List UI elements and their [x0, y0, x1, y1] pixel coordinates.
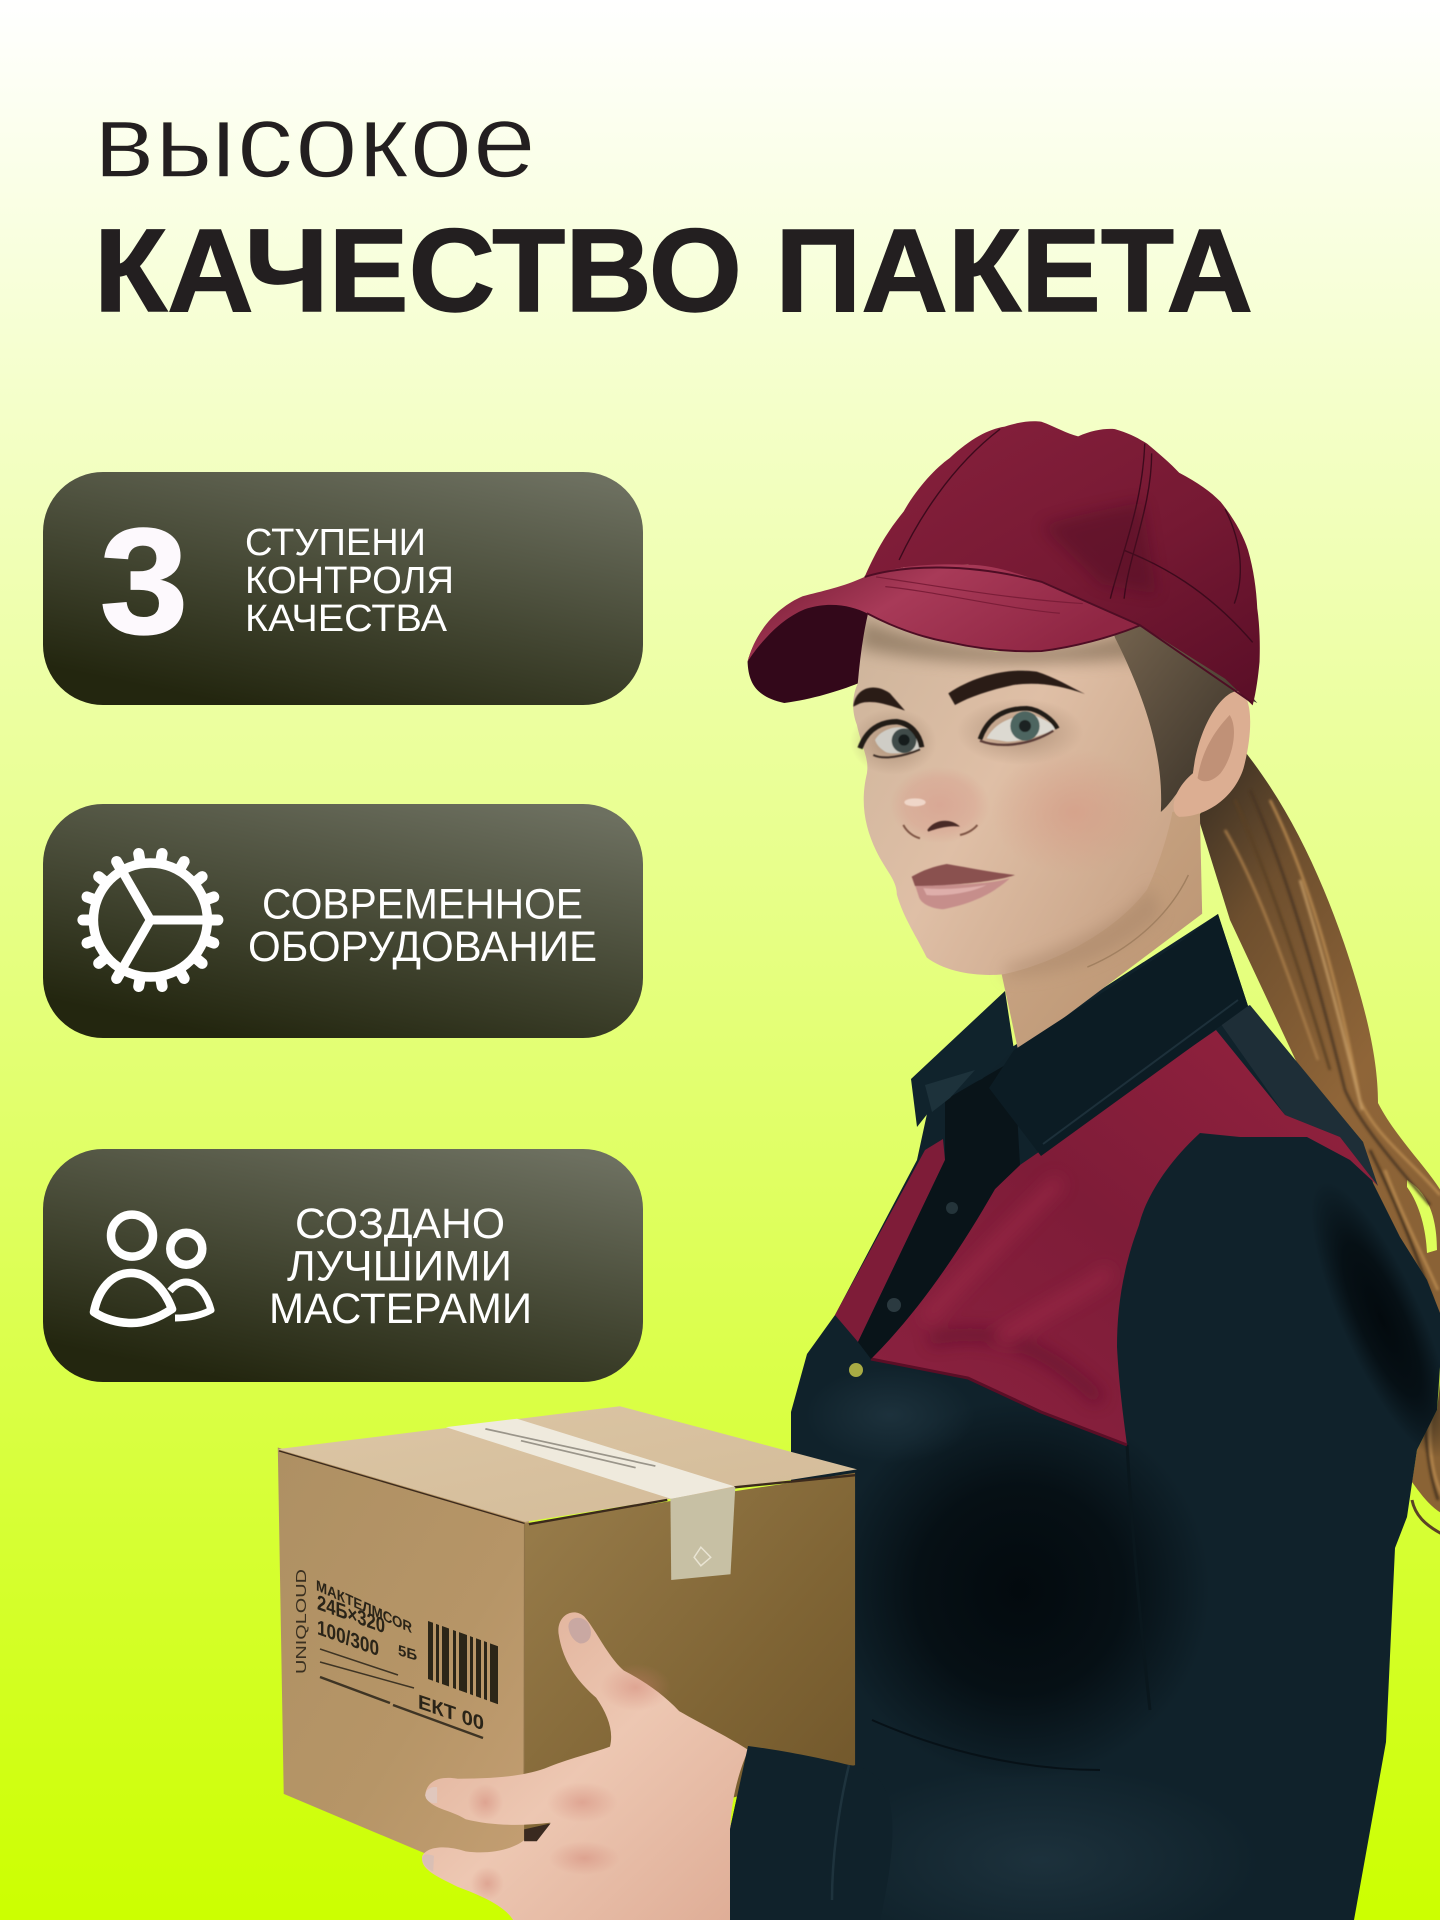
- knuckle reds: [468, 1664, 671, 1900]
- panel text: СОВРЕМЕННОЕ: [262, 880, 583, 928]
- cap shadow fold: [1041, 502, 1156, 594]
- cheek blush: [991, 749, 1156, 875]
- panel text: [248, 880, 597, 971]
- courier woman illustration: [278, 421, 1440, 1920]
- panel: modern equipment: [43, 804, 643, 1038]
- title line: высокое: высокое: [94, 83, 536, 200]
- cap crown: [865, 421, 1260, 705]
- ponytail hair: [1198, 749, 1440, 1534]
- panel text: ЛУЧШИМИ: [287, 1242, 512, 1290]
- eye socket shadows: [850, 698, 1083, 775]
- brim top: [748, 564, 1140, 662]
- panel: three stages of quality control: [43, 472, 643, 705]
- big number 3: 3: [100, 497, 188, 665]
- label code: 5Б: [398, 1642, 417, 1665]
- face shape: [853, 613, 1198, 975]
- box top face: [278, 1406, 857, 1522]
- label marks: EКT 00: [418, 1690, 484, 1735]
- panel text: СТУПЕНИ: [245, 522, 426, 564]
- box left face: [278, 1447, 529, 1853]
- hand holding box: [422, 1612, 748, 1920]
- side hair: [1110, 619, 1257, 812]
- cap seams: [899, 429, 1253, 642]
- head: [748, 421, 1260, 977]
- panel background: [43, 472, 643, 705]
- panel text: МАСТЕРАМИ: [269, 1285, 532, 1333]
- hem seam: [872, 1720, 1100, 1770]
- flap gap: [529, 1475, 855, 1524]
- chest highlight: [805, 1367, 975, 1463]
- icon: gear: [83, 854, 218, 986]
- packing tape: [446, 1419, 734, 1499]
- barcode: [428, 1621, 498, 1704]
- vertical brand text: UNIQLOUD: [293, 1569, 310, 1674]
- maroon yoke left: [835, 1139, 945, 1342]
- panel text: КОНТРОЛЯ: [245, 560, 454, 602]
- panel: created by the best masters: [43, 1149, 643, 1382]
- torso and sleeve: [730, 914, 1440, 1920]
- torso shadow: [830, 1400, 1210, 1780]
- ear: [1174, 691, 1250, 817]
- box right face: [524, 1473, 855, 1853]
- sleeve cuff: [730, 1746, 892, 1920]
- label size: 24Б×320: [317, 1590, 385, 1638]
- shirt collar: [911, 914, 1248, 1156]
- label heading: МАКТЕЛМСОR: [316, 1578, 413, 1637]
- brim underside: [748, 596, 869, 703]
- face features: [850, 671, 1085, 909]
- sleeve shadow: [1284, 1167, 1440, 1473]
- panel text: [269, 1200, 532, 1333]
- yoke seam: [871, 1359, 1127, 1445]
- brim stitching: [876, 577, 1083, 613]
- panel background: [43, 804, 643, 1038]
- forearm highlight: [820, 1765, 1260, 1920]
- icon: people: [94, 1215, 211, 1323]
- panel background: [43, 1149, 643, 1382]
- back shoulder panel: [1218, 1005, 1378, 1186]
- finger gap: [524, 1823, 551, 1841]
- panel text: ОБОРУДОВАНИЕ: [248, 923, 597, 971]
- title: [94, 83, 1253, 337]
- small print lines: [320, 1649, 483, 1738]
- panel text: СОЗДАНО: [295, 1200, 505, 1248]
- jaw shadow: [1005, 885, 1161, 977]
- neck: [1000, 797, 1202, 1052]
- hair strands: [1225, 790, 1440, 1500]
- cardboard box: [278, 1406, 857, 1853]
- sleeve seam: [1127, 1445, 1150, 1710]
- fingernails: [568, 1618, 591, 1644]
- left eyebrow: [853, 688, 905, 711]
- right eyebrow: [948, 671, 1085, 705]
- cuff seam: [832, 1765, 849, 1900]
- right eye: [980, 708, 1057, 745]
- yoke folds: [925, 1180, 1110, 1400]
- title line: качество пакета: КАЧЕСТВО ПАКЕТА: [94, 205, 1253, 337]
- panel text: КАЧЕСТВА: [245, 598, 448, 640]
- left eye: [860, 722, 922, 757]
- box label: [293, 1569, 498, 1738]
- hanging tape: [670, 1487, 735, 1580]
- label number: 100/300: [317, 1615, 379, 1661]
- placket and buttons: [849, 1060, 1020, 1377]
- panel text: [245, 522, 454, 640]
- nose shading: [890, 767, 990, 843]
- forehead shadow under the cap: [858, 618, 1156, 663]
- maroon yoke right: [871, 1030, 1378, 1445]
- lips: [912, 864, 1015, 909]
